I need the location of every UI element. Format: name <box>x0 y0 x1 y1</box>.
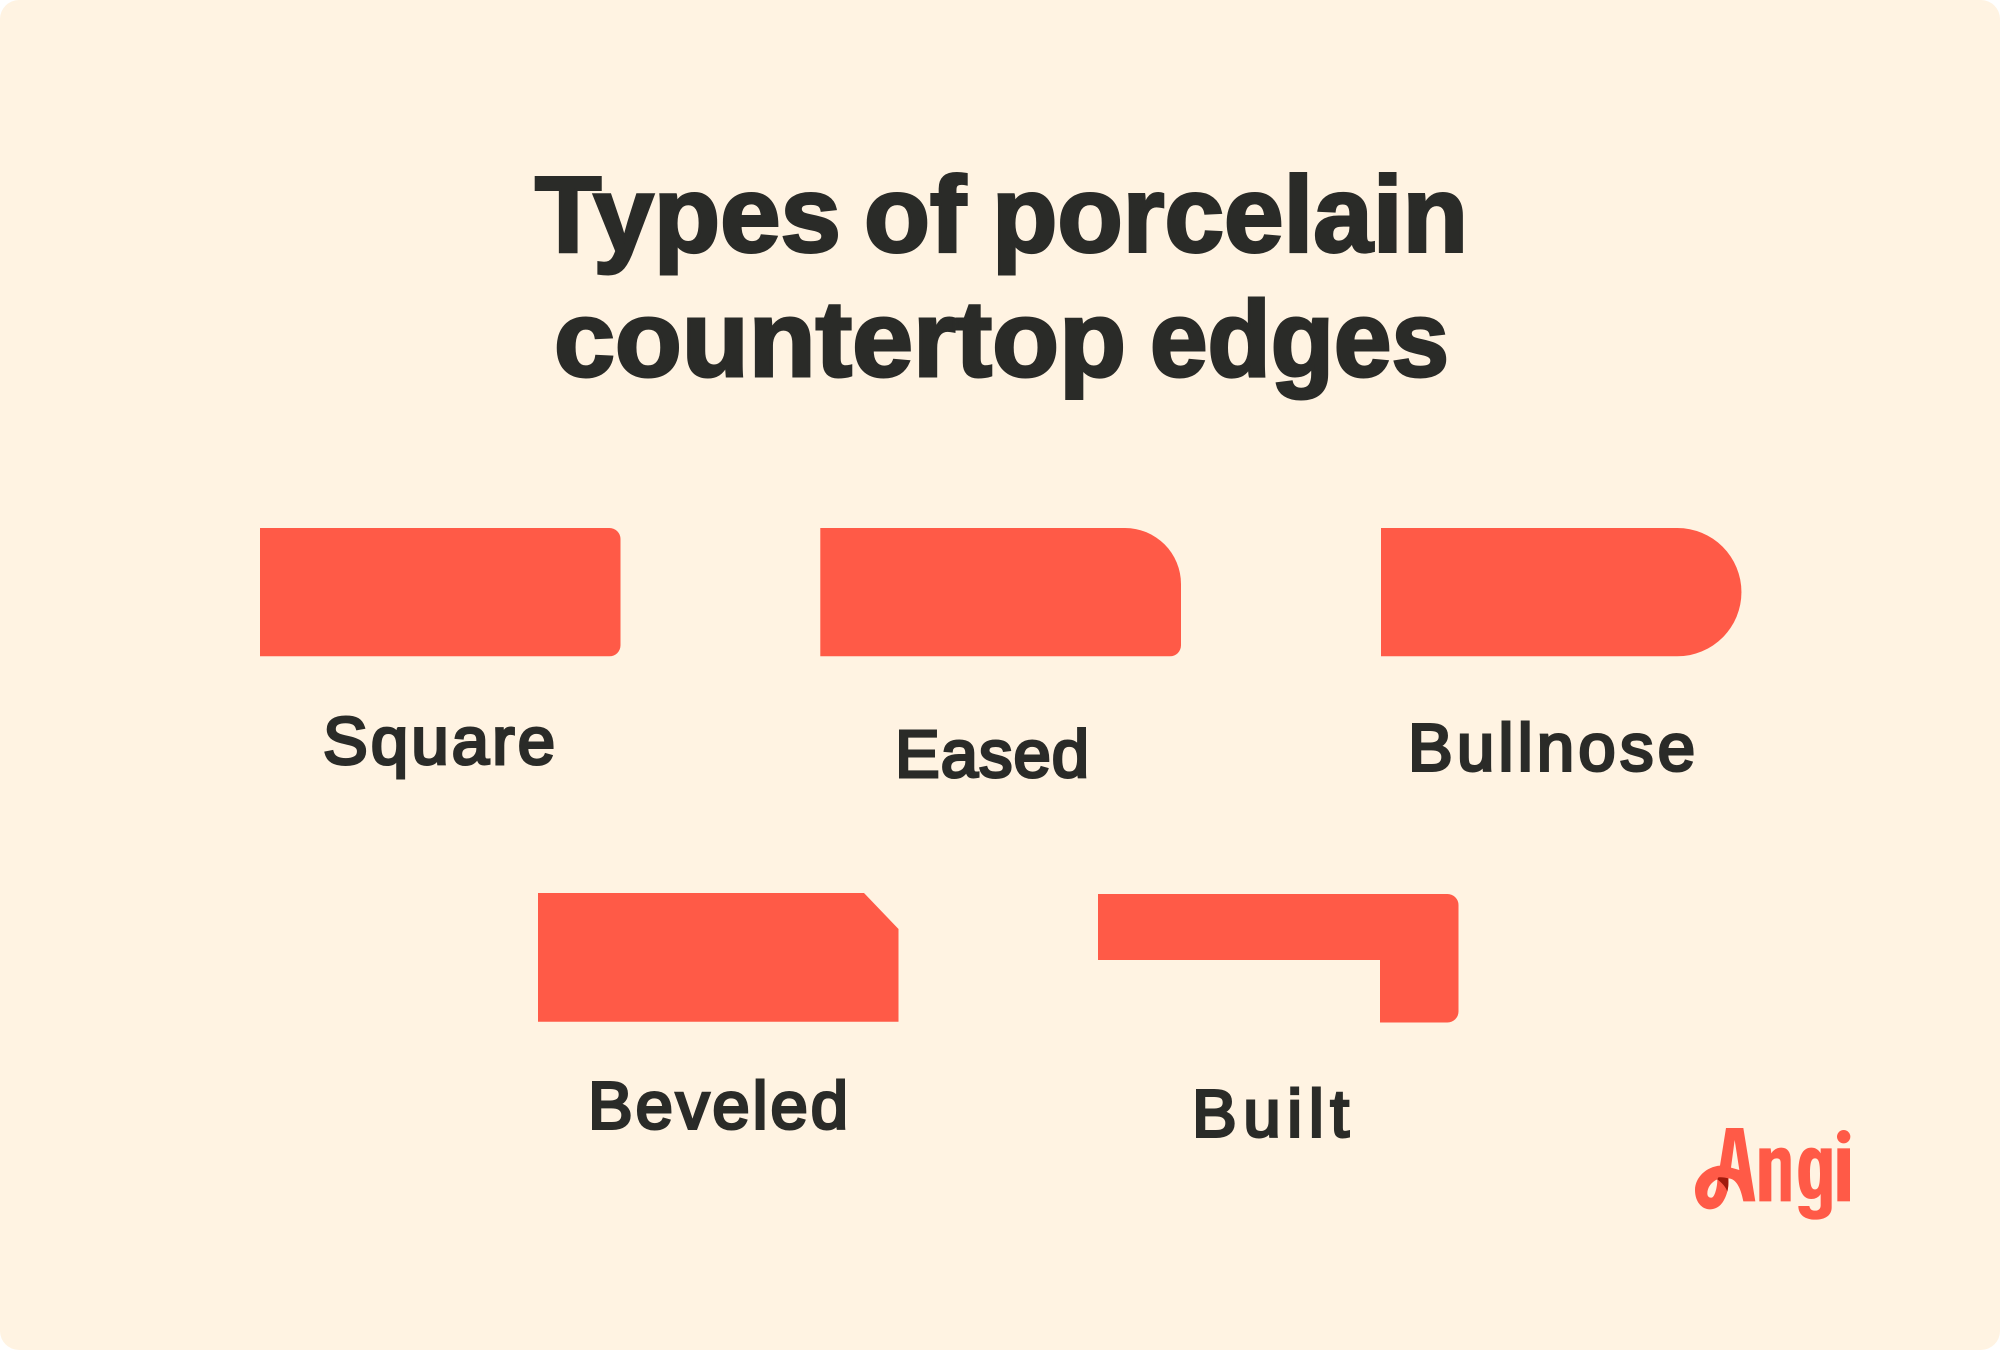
panel: square edge <box>260 528 620 779</box>
shape: bullnose edge profile <box>1381 528 1741 656</box>
title: porcelain <box>992 154 1468 274</box>
label: Bullnose: Bullnose <box>1408 710 1695 786</box>
logo: Angi <box>1695 1128 1850 1220</box>
logo letter A with loop <box>1695 1128 1755 1209</box>
title: countertop <box>554 278 1126 399</box>
title: Types <box>535 154 841 274</box>
logo letter g <box>1798 1148 1832 1220</box>
panel: beveled edge <box>538 893 898 1144</box>
logo loop overlap <box>1717 1177 1728 1192</box>
label: Eased: Eased <box>895 717 1089 792</box>
panel: eased edge <box>820 528 1181 792</box>
title <box>535 154 1468 399</box>
panel: built edge <box>1098 894 1458 1152</box>
logo letter n <box>1759 1148 1791 1201</box>
label: Beveled: Beveled <box>588 1069 848 1144</box>
panel: bullnose edge <box>1381 528 1741 786</box>
shape: square edge profile <box>260 528 620 656</box>
shape: built edge profile <box>1098 894 1458 1022</box>
logo letter i <box>1837 1130 1850 1201</box>
label: Square: Square <box>323 704 555 779</box>
shape: eased edge profile <box>820 528 1181 656</box>
title: of <box>864 154 967 274</box>
label: Built: Built <box>1192 1076 1349 1152</box>
shape: beveled edge profile <box>538 893 898 1022</box>
title: edges <box>1150 278 1449 399</box>
